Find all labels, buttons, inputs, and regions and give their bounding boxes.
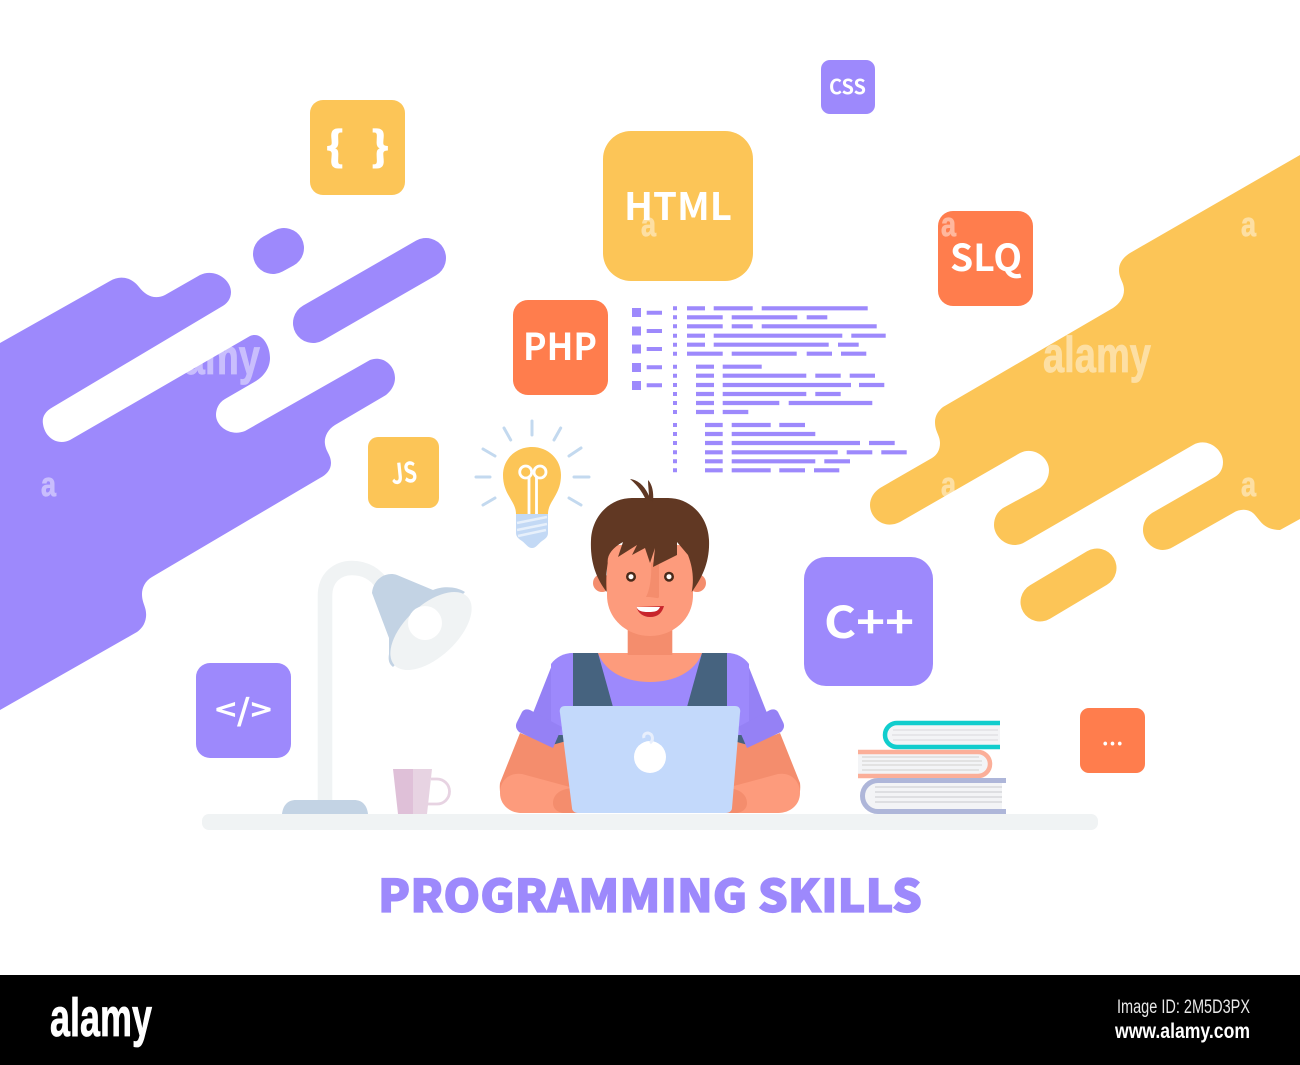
tile: HTML	[603, 131, 753, 281]
neck	[628, 625, 672, 655]
watermarks: alamy	[1043, 327, 1151, 383]
tile: HTML: HTML	[624, 176, 732, 231]
forearms and hands	[500, 774, 800, 813]
tile: braces: {	[326, 115, 344, 173]
watermarks: alamy	[152, 329, 260, 385]
tile: SLQ: SLQ	[950, 228, 1022, 282]
watermarks: a	[1241, 206, 1257, 244]
footer bar: www.alamy.com	[1114, 1020, 1250, 1043]
purple paint splash	[0, 248, 426, 710]
tile: C++: C++	[824, 587, 914, 651]
desk	[202, 814, 1098, 830]
yellow paint splash	[870, 155, 1300, 602]
footer bar: Image ID: 2M5D3PX	[1117, 997, 1250, 1018]
title: PROGRAMMING SKILLS	[378, 860, 922, 925]
stack of books	[858, 723, 1006, 812]
laptop	[560, 706, 740, 813]
tile: code tag	[196, 663, 291, 758]
footer bar: alamy	[50, 988, 152, 1048]
watermarks	[41, 206, 1257, 504]
tile: CSS	[821, 60, 875, 114]
tile: ellipsis: ...	[1102, 722, 1123, 751]
tile: code tag: </>	[215, 686, 272, 730]
body: shirt and overalls	[500, 653, 800, 813]
watermarks: a	[41, 466, 57, 504]
code listing	[632, 308, 907, 470]
watermarks: a	[941, 466, 957, 504]
tile: JS: JS	[389, 451, 419, 493]
tile: ellipsis	[1080, 708, 1145, 773]
icon: light bulb	[476, 421, 589, 548]
desk lamp	[282, 568, 485, 814]
tile: JS	[368, 437, 439, 508]
tile: PHP: PHP	[523, 317, 597, 371]
tile: SLQ	[938, 211, 1033, 306]
head	[593, 545, 706, 636]
watermarks: a	[1241, 466, 1257, 504]
coffee mug	[393, 769, 450, 814]
tile: braces: }	[371, 115, 389, 173]
tile: PHP	[513, 300, 608, 395]
watermarks: a	[941, 206, 957, 244]
footer bar	[0, 975, 1300, 1065]
watermarks: a	[641, 206, 657, 244]
hair	[591, 479, 709, 592]
tile: C++	[804, 557, 933, 686]
tile: CSS: CSS	[829, 71, 866, 100]
programmer character	[500, 479, 800, 813]
tile: braces	[310, 100, 405, 195]
